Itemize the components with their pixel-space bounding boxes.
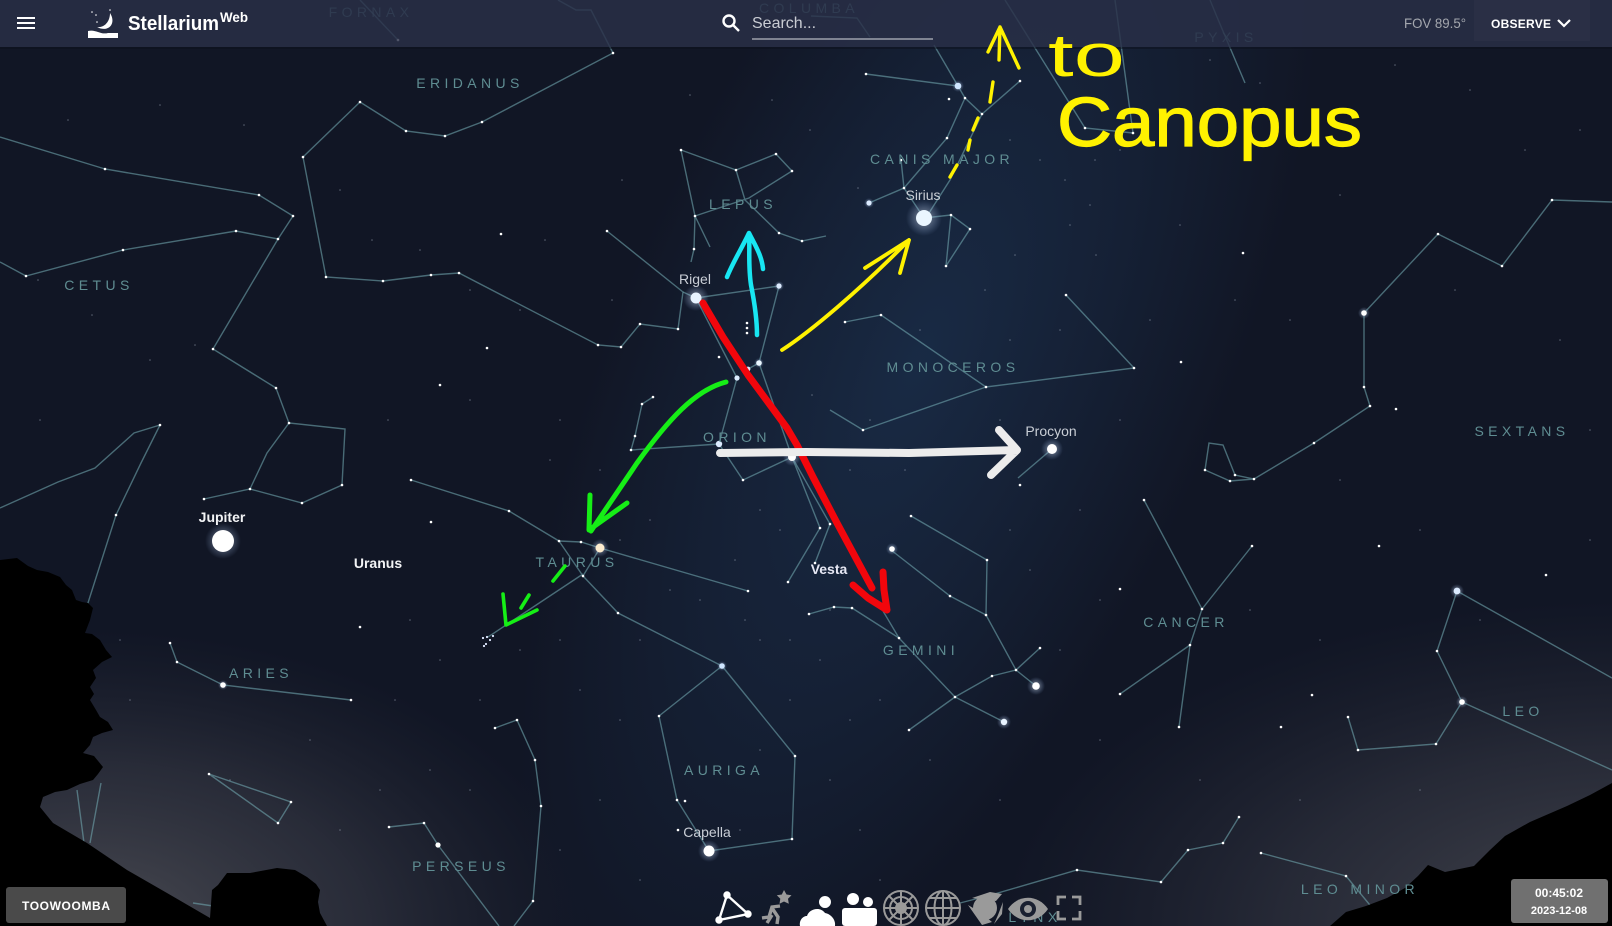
date and time box: 00:45:02 [1535,886,1583,900]
star and planet names: Capella [683,824,731,840]
constellation: Leo [1348,591,1612,770]
annotation: to Canopus: Canopus [1057,83,1362,161]
icon: galaxy swirl [968,892,1003,925]
icon: menu [17,18,35,28]
arrow: green, to Aldebaran [589,382,726,531]
star and planet names: Uranus [354,555,402,571]
constellation names: LEO [1502,703,1544,719]
observe button [1474,0,1590,41]
constellation names: COLUMBA [759,0,859,16]
bottom toolbar icons [716,890,1080,926]
constellation: Lepus [681,150,826,262]
date and time box: 2023-12-08 [1531,905,1587,917]
icon: atmosphere grid [884,891,918,925]
constellation names: LEPUS [709,196,777,212]
constellation: Perseus [389,720,541,926]
constellation: Leo Minor [960,817,1374,910]
date and time box [1511,879,1608,923]
arrow: green dashed, to Pleiades [503,566,565,625]
icon: cloud and sun [800,896,835,926]
constellation names: SEXTANS [1474,423,1570,439]
constellation: Cancer [1120,500,1252,727]
star and planet names: Procyon [1025,423,1077,439]
constellation names: FORNAX [329,4,413,20]
arrow: red, to Gemini [703,303,887,610]
constellation names: CETUS [64,277,134,293]
constellation: Puppis and Pyxis [1005,0,1245,133]
constellation: Monoceros [830,295,1134,430]
star and planet names: Vesta [811,561,848,577]
constellation: Auriga [659,666,795,851]
app title superscript: Web [220,9,248,25]
star and planet names [199,187,1077,840]
arrow: yellow, to Sirius [782,240,909,350]
bright stars [205,80,1468,862]
star and planet names: Sirius [905,187,941,203]
constellation: Aries [170,643,351,700]
app title: Stellarium [128,13,219,35]
annotation: to Canopus: to [1048,22,1125,89]
left horizon silhouette [0,558,327,926]
constellation: Eridanus [303,0,683,347]
star and planet names: Jupiter [199,509,246,525]
location button: TOOWOOMBA [22,899,110,913]
constellation names: GEMINI [883,642,959,658]
top toolbar [0,0,1612,49]
icon: globe [926,891,960,925]
field of view: FOV 89.5° [1404,15,1466,31]
icon: constellations [716,892,751,923]
icon: running figure with star [762,890,792,924]
constellation: Fornax [360,0,398,40]
constellation: Cetus [0,137,345,906]
constellation: Orion [631,286,830,582]
icon: Stellarium logo [88,10,118,38]
constellation names: ARIES [229,665,293,681]
constellation names: MONOCEROS [887,359,1019,375]
right horizon silhouette [1330,783,1612,926]
constellation: Triangulum [209,774,291,823]
constellation names: ERIDANUS [416,75,524,91]
annotation: to Canopus [1048,22,1362,161]
star and planet names: Rigel [679,271,711,287]
location button [6,887,126,923]
search field: Search... [752,15,816,32]
constellation names: CANIS MAJOR [870,151,1014,167]
constellation: Gemini [809,516,1040,730]
constellation: Hydra [1205,200,1612,481]
constellation names: PYXIS [1194,29,1258,45]
constellation names: PERSEUS [412,858,510,874]
arrow: cyan, to Lepus [727,233,763,335]
arrow: white, to Procyon [720,430,1017,475]
constellation names: AURIGA [684,762,764,778]
constellation names: LYNX [1008,909,1062,925]
icon: fullscreen [1058,897,1080,919]
icon: people [842,893,877,926]
constellation names: LEO MINOR [1301,881,1419,897]
constellation names: TAURUS [536,554,618,570]
constellation names: ORION [703,429,771,445]
constellation: Taurus [411,480,748,666]
observe button: OBSERVE [1491,17,1551,31]
constellation names: CANCER [1143,614,1229,630]
constellation: Canis Minor [1018,449,1052,478]
constellation: Canis Major [811,16,1020,266]
arrow: yellow dashed, to Canopus [950,27,1019,177]
icon: eye [1008,898,1048,920]
icon: search [724,16,739,31]
Pleiades cluster [483,636,493,646]
